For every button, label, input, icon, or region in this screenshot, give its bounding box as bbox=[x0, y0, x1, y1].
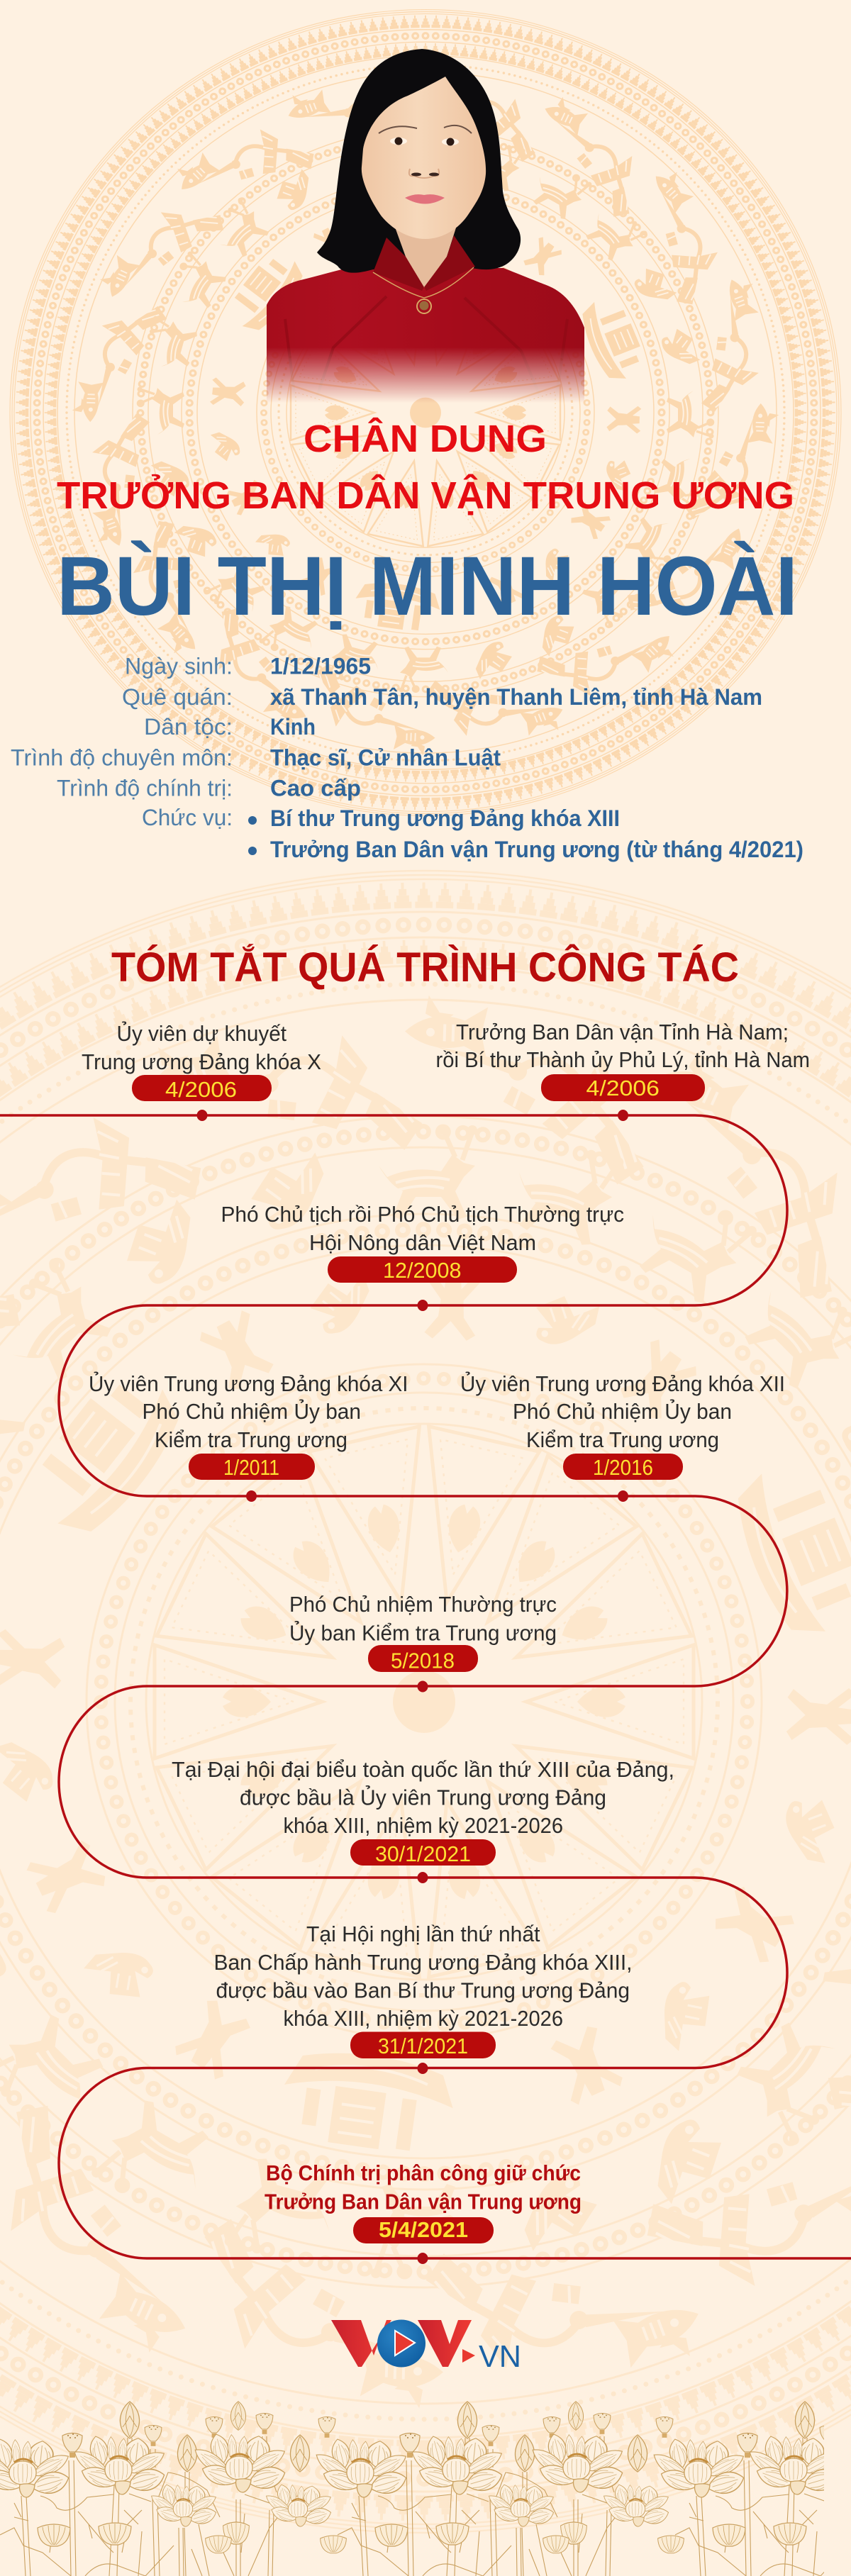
timeline entry: 4/2006 alternate member: 4/2006 bbox=[165, 1077, 237, 1102]
timeline entry: 5/2018: Ủy ban Kiểm tra Trung ương bbox=[289, 1619, 557, 1645]
timeline entry: 5/4/2021 highlighted: 5/4/2021 bbox=[379, 2217, 468, 2242]
timeline entry: 1/2011 bbox=[89, 1371, 408, 1480]
timeline entry: 31/1/2021: 31/1/2021 bbox=[378, 2034, 468, 2058]
timeline entry: 12/2008: Phó Chủ tịch rồi Phó Chủ tịch Thường trực bbox=[221, 1202, 624, 1227]
ethnicity bbox=[144, 714, 316, 740]
birth date: 1/12/1965 bbox=[270, 654, 371, 679]
political qualification: Cao cấp bbox=[270, 776, 361, 801]
face bbox=[362, 77, 486, 239]
title: Chân dung: CHÂN DUNG bbox=[304, 417, 547, 460]
background: bronze drum pattern, lower section bbox=[0, 871, 851, 2533]
timeline entry: 31/1/2021: được bầu vào Ban Bí thư Trung ương Đảng bbox=[216, 1978, 630, 2002]
facial features bbox=[379, 126, 472, 204]
portrait bbox=[267, 49, 584, 411]
hometown: xã Thanh Tân, huyện Thanh Liêm, tỉnh Hà Nam bbox=[270, 684, 762, 710]
timeline entry: 12/2008: 12/2008 bbox=[383, 1258, 461, 1283]
timeline entry: 4/2006 Ha Nam: Trưởng Ban Dân vận Tỉnh Hà Nam; bbox=[456, 1020, 789, 1044]
timeline entry: 4/2006 alternate member: Ủy viên dự khuyết bbox=[116, 1020, 287, 1046]
timeline entry: 1/2011: Kiểm tra Trung ương bbox=[155, 1427, 347, 1452]
hair bbox=[317, 49, 521, 273]
timeline entry: 5/4/2021 highlighted: Trưởng Ban Dân vận Trung ương bbox=[265, 2190, 582, 2214]
timeline entry: 30/1/2021: 30/1/2021 bbox=[375, 1841, 471, 1866]
positions: Bí thư Trung ương Đảng khóa XIII bbox=[270, 805, 620, 831]
timeline entry: 31/1/2021: khóa XIII, nhiệm kỳ 2021-2026 bbox=[284, 2006, 563, 2031]
timeline entry: 4/2006 Ha Nam: 4/2006 bbox=[586, 1076, 660, 1100]
professional qualification: Thạc sĩ, Cử nhân Luật bbox=[270, 745, 501, 770]
timeline entry: 30/1/2021: được bầu là Ủy viên Trung ương Đảng bbox=[240, 1784, 606, 1810]
timeline entry: 30/1/2021: Tại Đại hội đại biểu toàn quốc lần thứ XIII của Đảng, bbox=[172, 1757, 674, 1782]
timeline entry: 31/1/2021: Ban Chấp hành Trung ương Đảng khóa XIII, bbox=[214, 1950, 633, 1975]
timeline entry: 4/2006 Ha Nam: rồi Bí thư Thành ủy Phủ Lý, tỉnh Hà Nam bbox=[435, 1047, 810, 1072]
timeline entry: 1/2016: 1/2016 bbox=[593, 1455, 653, 1480]
timeline entry: 5/4/2021 highlighted: Bộ Chính trị phân công giữ chức bbox=[266, 2160, 581, 2185]
title: Trưởng Ban Dân vận Trung ương: TRƯỞNG BAN DÂN VẬN TRUNG ƯƠNG bbox=[57, 474, 794, 517]
logo: VOV.VN bbox=[331, 2320, 521, 2374]
timeline entry: 1/2016: Phó Chủ nhiệm Ủy ban bbox=[513, 1398, 732, 1424]
timeline entry: 31/1/2021 bbox=[214, 1922, 633, 2058]
ethnicity: Dân tộc: bbox=[144, 714, 233, 740]
timeline entry: 4/2006 alternate member: Trung ương Đảng khóa X bbox=[82, 1049, 321, 1074]
birth date: Ngày sinh: bbox=[125, 654, 233, 679]
lotus illustration bbox=[0, 2402, 851, 2576]
political qualification bbox=[57, 776, 361, 801]
timeline entry: 31/1/2021: Tại Hội nghị lần thứ nhất bbox=[306, 1922, 540, 1946]
positions: Chức vụ: bbox=[142, 805, 233, 830]
timeline entry: 30/1/2021 bbox=[172, 1757, 674, 1866]
timeline entry: 4/2006 Ha Nam bbox=[435, 1020, 810, 1101]
background: bronze drum pattern behind portrait bbox=[10, 10, 841, 815]
timeline entry: 4/2006 alternate member bbox=[82, 1020, 321, 1102]
birth date bbox=[125, 654, 371, 679]
timeline dots bbox=[197, 1110, 628, 2264]
professional qualification bbox=[11, 745, 501, 770]
hometown: Quê quán: bbox=[122, 684, 233, 710]
timeline entry: 1/2016: Ủy viên Trung ương Đảng khóa XII bbox=[460, 1371, 785, 1396]
timeline entry: 1/2016: Kiểm tra Trung ương bbox=[526, 1427, 719, 1452]
timeline entry: 5/2018: 5/2018 bbox=[391, 1648, 455, 1673]
logo: VOV.VN: VN bbox=[479, 2339, 521, 2374]
dress bbox=[267, 268, 584, 411]
timeline entry: 1/2016 bbox=[460, 1371, 785, 1480]
timeline entry: 1/2011: 1/2011 bbox=[223, 1455, 279, 1480]
necklace and pendant bbox=[373, 267, 474, 313]
timeline entry: 12/2008 bbox=[221, 1202, 624, 1283]
biography info block bbox=[11, 654, 803, 862]
positions: Trưởng Ban Dân vận Trung ương (từ tháng 4/2021) bbox=[270, 837, 803, 862]
timeline entry: 5/2018 bbox=[289, 1592, 557, 1673]
neck bbox=[394, 223, 457, 288]
positions bbox=[142, 805, 803, 862]
timeline entry: 30/1/2021: khóa XIII, nhiệm kỳ 2021-2026 bbox=[284, 1813, 563, 1838]
professional qualification: Trình độ chuyên môn: bbox=[11, 745, 233, 770]
timeline entry: 12/2008: Hội Nông dân Việt Nam bbox=[309, 1230, 536, 1255]
timeline entry: 5/4/2021 highlighted bbox=[265, 2160, 582, 2243]
timeline entry: 1/2011: Ủy viên Trung ương Đảng khóa XI bbox=[89, 1371, 408, 1396]
political qualification: Trình độ chính trị: bbox=[57, 776, 233, 801]
timeline entry: 1/2011: Phó Chủ nhiệm Ủy ban bbox=[142, 1398, 361, 1424]
collar bbox=[373, 235, 475, 291]
timeline serpentine line bbox=[0, 1115, 851, 2258]
section heading: TÓM TẮT QUÁ TRÌNH CÔNG TÁC bbox=[111, 944, 739, 991]
timeline entry: 5/2018: Phó Chủ nhiệm Thường trực bbox=[289, 1592, 557, 1617]
title: name: BÙI THỊ MINH HOÀI bbox=[57, 540, 798, 633]
ethnicity: Kinh bbox=[270, 714, 316, 740]
